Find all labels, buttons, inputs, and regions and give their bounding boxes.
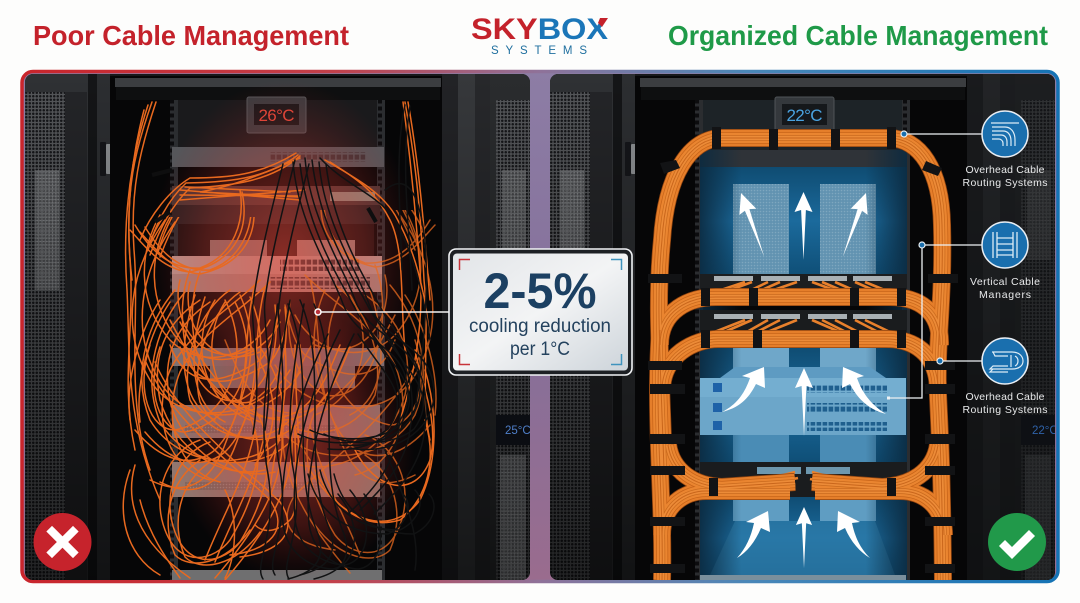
label: vertical cable managers: Managers bbox=[979, 289, 1031, 301]
organized orange cable bundles bbox=[658, 138, 944, 580]
title: poor cable management: Poor Cable Management bbox=[33, 20, 349, 51]
vertical cable ties bbox=[152, 170, 376, 222]
black cable straps bbox=[648, 127, 958, 573]
callout description bbox=[469, 315, 611, 360]
black tangled cables bbox=[253, 105, 434, 579]
icon: green check badge bbox=[988, 513, 1046, 571]
temperature display: 26°C bbox=[247, 97, 306, 133]
label: overhead cable routing systems, lower bbox=[963, 392, 1048, 415]
title: organized cable management: Organized Cable Management bbox=[668, 20, 1048, 51]
logo: Skybox Systems: SKYBOX bbox=[471, 13, 608, 46]
small temperature readout: 25°C: 25°C bbox=[505, 425, 531, 437]
logo: Skybox Systems: SYSTEMS bbox=[491, 45, 587, 57]
cable fan-outs into patch panels bbox=[712, 282, 892, 487]
panel: organized cable management rack bbox=[550, 74, 1058, 580]
callout figure: 2-5% bbox=[484, 263, 596, 319]
icon: red cross badge bbox=[34, 513, 92, 571]
temperature display: 22°C: 22°C bbox=[786, 106, 822, 125]
tangled orange cables bbox=[123, 102, 436, 580]
airflow arrows bbox=[722, 190, 886, 568]
icon: vertical cable managers bbox=[982, 222, 1028, 268]
label: overhead cable routing systems: Overhead Cable bbox=[966, 164, 1045, 176]
callout corner marks bbox=[460, 260, 622, 364]
temperature display: 26°C: 26°C bbox=[258, 106, 294, 125]
label: overhead cable routing systems, lower: Overhead Cable bbox=[966, 391, 1045, 403]
small temperature readout: 22°C: 22°C bbox=[1032, 425, 1058, 437]
leader dots bbox=[887, 131, 943, 400]
heat glow bbox=[160, 93, 410, 570]
icon: overhead cable routing bbox=[982, 111, 1028, 157]
servers and switches bbox=[172, 147, 384, 580]
network switches bbox=[700, 367, 906, 580]
label: vertical cable managers: Vertical Cable bbox=[970, 276, 1040, 288]
leader: hot spot to callout bbox=[315, 309, 450, 315]
label: overhead cable routing systems: Routing Systems bbox=[962, 177, 1048, 189]
temperature display: 22°C bbox=[775, 97, 834, 133]
icon: overhead cable routing loop bbox=[982, 338, 1028, 384]
callout description: cooling reduction bbox=[469, 315, 611, 337]
callout: cooling reduction statistic bbox=[449, 249, 632, 375]
leader lines bbox=[888, 134, 982, 398]
patch panels bbox=[700, 274, 907, 497]
cooling airflow chambers bbox=[700, 150, 907, 580]
label: overhead cable routing systems bbox=[963, 166, 1048, 188]
callout description: per 1°C bbox=[510, 338, 570, 360]
panel: poor cable management rack bbox=[25, 74, 531, 580]
label: vertical cable managers bbox=[970, 278, 1040, 300]
label: overhead cable routing systems, lower: Routing Systems bbox=[962, 404, 1048, 416]
